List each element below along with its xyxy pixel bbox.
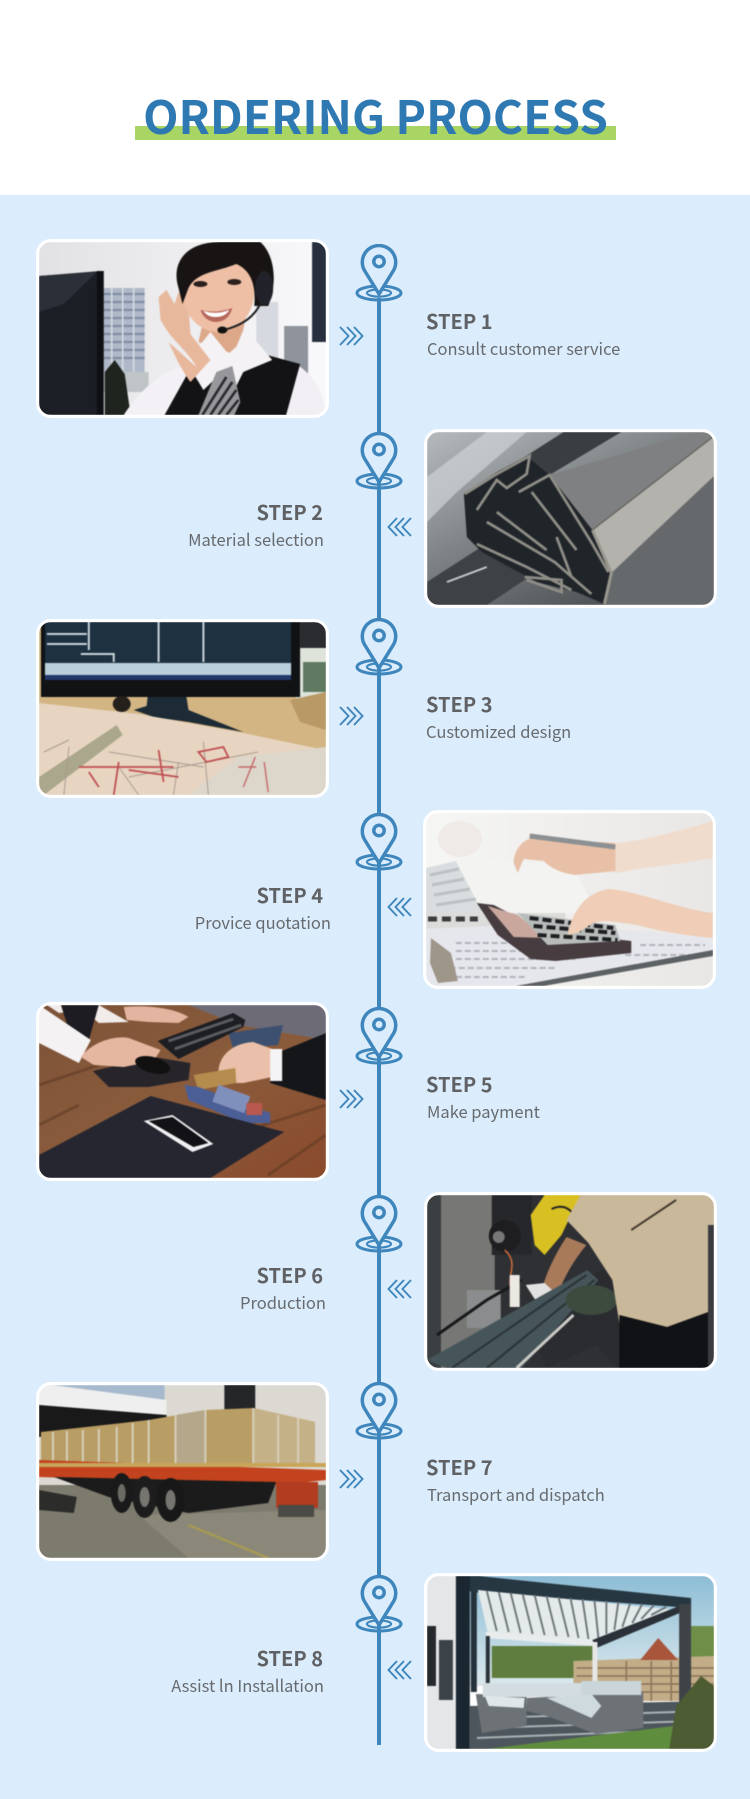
photo: aluminium profiles (424, 429, 717, 608)
text: step 7: Transport and dispatch (427, 1482, 605, 1506)
photo: customer service operator (36, 239, 329, 418)
icon: arrow right, step 7 (339, 1469, 364, 1489)
text: step 5 (426, 1069, 540, 1123)
text: step 2 (188, 497, 324, 551)
text: step 1: Consult customer service (427, 336, 620, 360)
icon: arrow left, step 2 (387, 517, 412, 537)
text: step 5: STEP 5 (426, 1069, 492, 1098)
timeline line (377, 298, 381, 1745)
icon: pin 5 (356, 1007, 402, 1064)
text: step 3 (426, 689, 571, 743)
text: step 7: STEP 7 (426, 1452, 492, 1481)
icon: arrow left, step 6 (387, 1279, 412, 1299)
text: step 1: STEP 1 (426, 306, 492, 335)
icon: pin 1 (356, 244, 402, 302)
text: step 7 (426, 1452, 605, 1506)
text: step 6 description: Production (240, 1290, 326, 1314)
text: step 1 (426, 306, 620, 360)
text: step 8 (171, 1643, 324, 1697)
title text: ORDERING PROCESS (143, 82, 608, 148)
icon: pin 3 (356, 618, 402, 676)
text: step 2: Material selection (188, 527, 324, 551)
icon: arrow right, step 5 (339, 1089, 364, 1109)
photo: payment at desk (36, 1002, 329, 1181)
text: step 3: STEP 3 (426, 689, 492, 718)
text: step 8: Assist ln Installation (171, 1673, 324, 1697)
icon: pin 8 (356, 1575, 402, 1632)
text: step 3: Customized design (426, 719, 571, 743)
icon: arrow left, step 8 (387, 1660, 412, 1680)
text: step 6: STEP 6 (256, 1260, 323, 1289)
icon: pin 7 (356, 1382, 402, 1440)
text: step 8: STEP 8 (256, 1643, 323, 1672)
text: step 5: Make payment (427, 1099, 540, 1123)
icon: arrow left, step 4 (387, 897, 412, 917)
icon: pin 4 (356, 813, 402, 870)
photo: production worker (424, 1192, 717, 1371)
icon: arrow right, step 1 (339, 326, 364, 346)
icon: pin 2 (356, 432, 402, 490)
photo: calculating quotation (423, 810, 716, 989)
icon: pin 6 (356, 1195, 402, 1252)
text: step 4 description: Provice quotation (195, 910, 331, 934)
title (135, 82, 616, 148)
title highlight bar (135, 126, 616, 140)
photo: installed pergola (424, 1573, 717, 1752)
photo: CAD design desk (36, 619, 329, 798)
photo: truck dispatch (36, 1382, 329, 1561)
text: step 2: STEP 2 (256, 497, 323, 526)
icon: arrow right, step 3 (339, 706, 364, 726)
text: step 4: STEP 4 (256, 880, 323, 909)
